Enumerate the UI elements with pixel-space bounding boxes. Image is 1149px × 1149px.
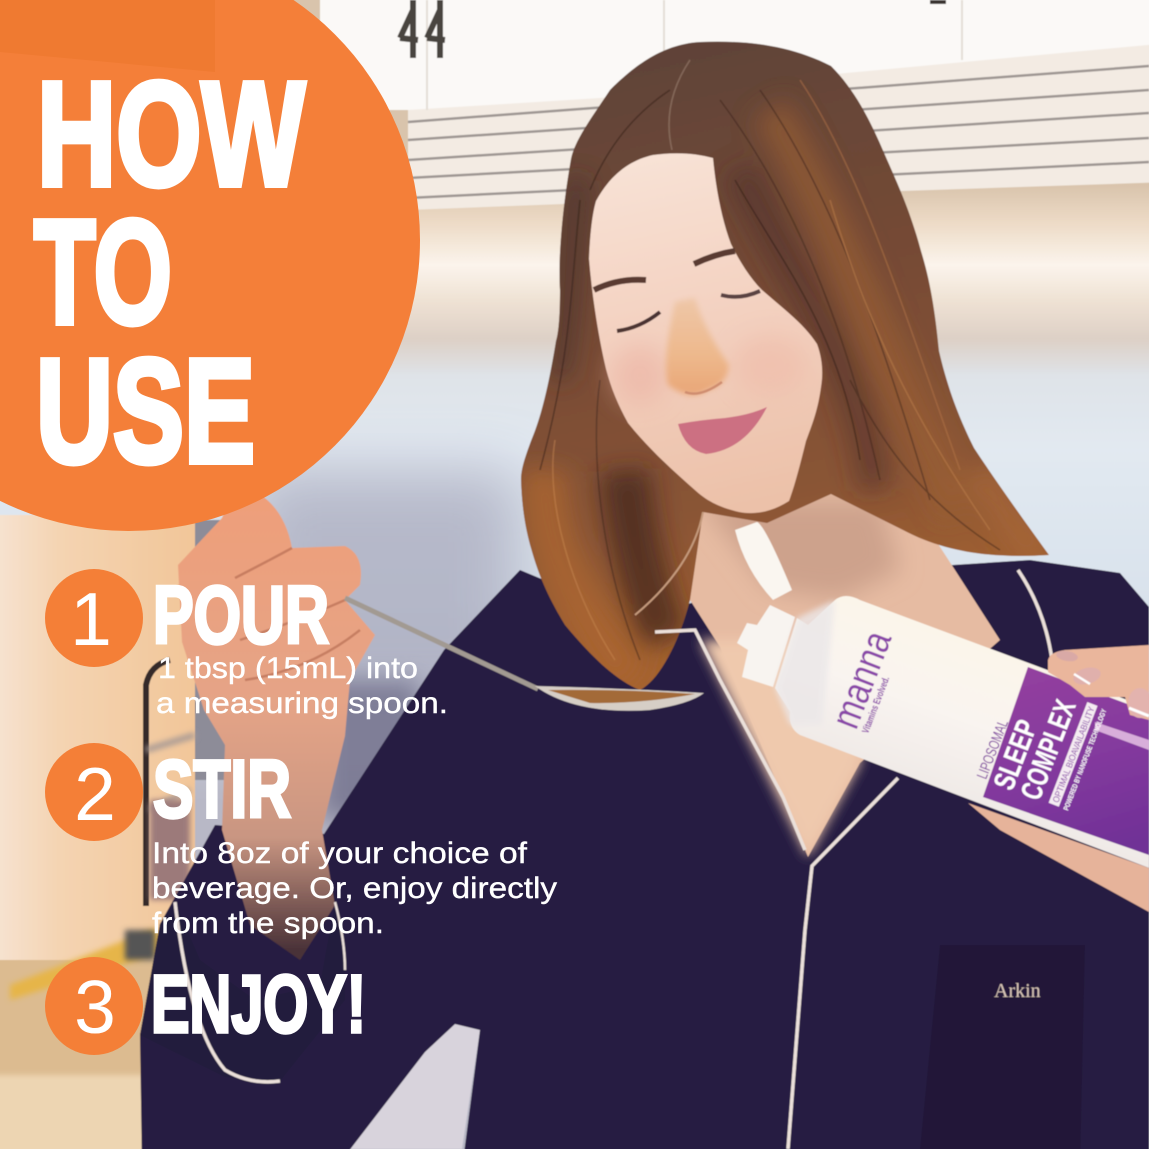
- title: HOW TO USE: TO: [34, 190, 172, 355]
- number badge 1: 1: [70, 577, 112, 661]
- step 2 description: [152, 837, 557, 940]
- tagline: Vitamins Evolved.: [861, 675, 892, 735]
- number badge 3: 3: [74, 965, 116, 1049]
- step 2 description: beverage. Or, enjoy directly: [152, 872, 557, 905]
- hand holding bottle: [968, 645, 1149, 912]
- step 3: [45, 957, 366, 1055]
- bottle flip lid: [735, 522, 792, 600]
- finger creases: [235, 548, 360, 680]
- hair shading and strands: [540, 60, 1040, 680]
- optimal bioavailability tag: OPTIMAL BIOAVAILABILITY: [1051, 705, 1096, 804]
- number badge 3: [45, 957, 143, 1055]
- woman: neck and chest: [690, 470, 1000, 857]
- title: HOW TO USE: [34, 52, 305, 494]
- number badge 1: [45, 569, 143, 667]
- spoon with liquid: [345, 598, 704, 711]
- powered by line: POWERED BY NANOFUSE TECHNOLOGY: [1061, 708, 1109, 812]
- complex label: COMPLEX: [1015, 696, 1083, 805]
- woman: navy pajama top: [140, 560, 1149, 1149]
- number badge 2: [45, 743, 143, 841]
- woman: facial features: [594, 251, 806, 454]
- step 1 description: 1 tbsp (15mL) into: [158, 652, 418, 685]
- pajama sleeve cuff: [140, 902, 345, 1081]
- manna logo: manna: [823, 625, 900, 734]
- liposomal label: LIPOSOMAL: [974, 717, 1012, 781]
- title: HOW TO USE: HOW: [37, 52, 305, 217]
- step 1 description: a measuring spoon.: [156, 687, 448, 720]
- pajama pocket: Arkin: [994, 980, 1041, 1002]
- title: HOW TO USE: USE: [36, 329, 255, 494]
- pajama piping: [175, 570, 1080, 1149]
- purple label: [983, 667, 1149, 855]
- upper cabinets and vent hood: [320, 0, 1149, 210]
- bottle cap: [737, 605, 795, 687]
- label highlight: [1095, 722, 1149, 750]
- step 1 heading: POUR: [153, 570, 329, 661]
- step 2 heading: STIR: [153, 744, 291, 835]
- step 1 description: [156, 652, 448, 720]
- step 3 heading: ENJOY!: [151, 959, 366, 1050]
- sleep label: SLEEP: [988, 715, 1044, 795]
- pajama pocket: [918, 945, 1085, 1149]
- bottle body: [775, 596, 1149, 868]
- number badge 2: 2: [74, 752, 116, 836]
- step 2: [45, 743, 557, 940]
- hand and forearm holding spoon: [178, 491, 375, 960]
- product bottle: [735, 522, 1149, 868]
- step 1: [45, 569, 448, 720]
- woman: face: [589, 153, 822, 513]
- step 2 description: from the spoon.: [152, 907, 384, 940]
- woman: hair: [521, 42, 1049, 690]
- step 2 description: Into 8oz of your choice of: [152, 837, 528, 870]
- stray hair strand: [635, 512, 703, 615]
- orange title circle: [0, 0, 420, 531]
